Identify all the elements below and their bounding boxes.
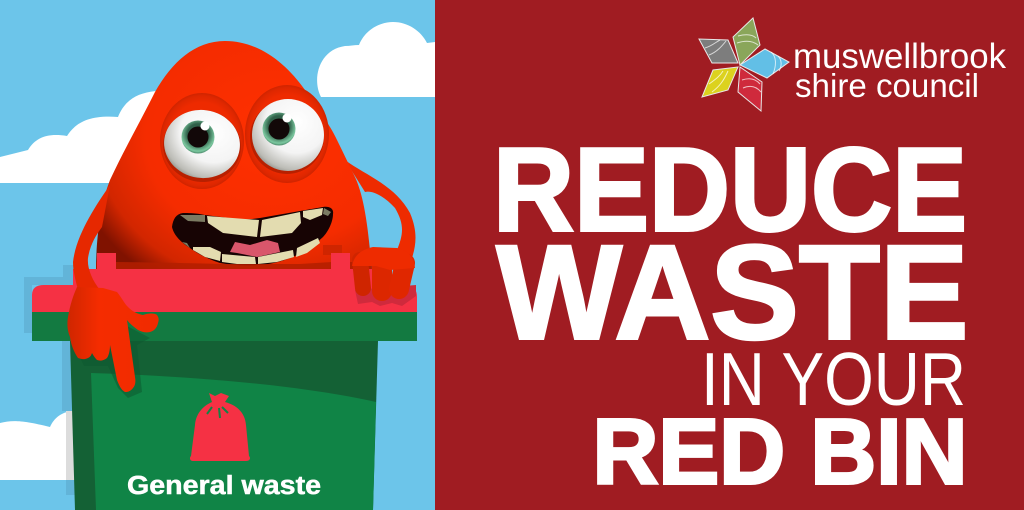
logo petal: blue	[740, 49, 789, 78]
headline: red bin: RED BIN	[592, 400, 968, 504]
monster hand: left pointing	[67, 287, 159, 392]
bin shadow	[24, 265, 76, 495]
left hand shadow	[74, 325, 150, 398]
tongue	[230, 240, 280, 257]
logo petal: green	[733, 18, 760, 65]
red panel	[435, 0, 1024, 510]
monster hand: right on lid	[352, 247, 416, 306]
right hand shadow	[355, 285, 416, 306]
headline: in your: IN YOUR	[701, 338, 966, 422]
right eye	[245, 85, 329, 183]
logo wordmark line 1: muswellbrook	[793, 37, 1006, 76]
lower teeth	[193, 238, 320, 264]
left eye	[158, 93, 246, 189]
monster arm: left	[73, 185, 110, 290]
logo petal: grey	[699, 39, 738, 63]
monster body	[96, 41, 372, 272]
lid band	[32, 312, 417, 341]
tab shadow on monster	[323, 245, 342, 255]
logo petal: red	[738, 67, 762, 111]
headline: waste: WASTE	[496, 218, 968, 368]
sky panel	[0, 0, 435, 510]
logo petal line details	[705, 35, 781, 92]
upper teeth	[207, 208, 323, 237]
bag knot detail	[207, 407, 228, 418]
bin body	[70, 341, 378, 510]
shadow strip on monster above lid	[96, 262, 372, 270]
logo petal: yellow	[702, 67, 738, 97]
back teeth	[180, 208, 331, 248]
wheelie bin	[32, 253, 417, 510]
logo: muswellbrook shire council	[699, 18, 1006, 111]
right hand palm	[352, 247, 415, 270]
lid top	[32, 253, 417, 312]
bin front panel	[91, 373, 376, 510]
bin label: General waste	[127, 472, 321, 500]
headline	[493, 124, 968, 504]
cloud: middle left	[0, 91, 156, 183]
headline: reduce: REDUCE	[493, 124, 967, 256]
monster arm: right upper	[345, 160, 416, 258]
general waste bag icon	[190, 393, 250, 461]
mouth	[172, 207, 333, 265]
cloud: top right	[317, 22, 435, 97]
right hand fingers	[360, 260, 363, 288]
logo wordmark line 2: shire council	[795, 67, 979, 104]
cloud: bottom left	[0, 411, 75, 480]
